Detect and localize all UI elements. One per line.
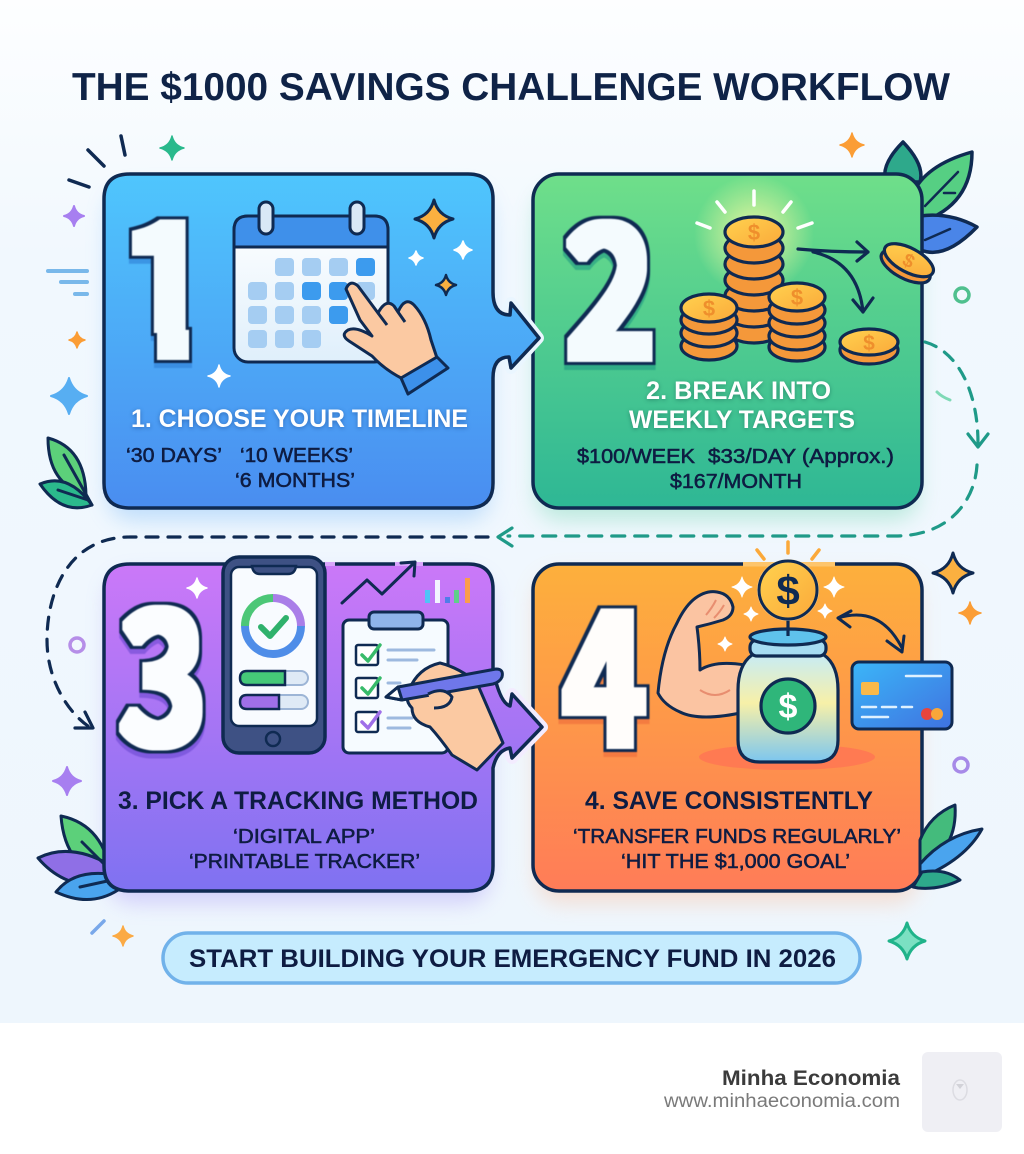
panel 2 details: $100/WEEK (577, 446, 696, 468)
icon: leaves behind panel 3 (38, 816, 118, 900)
decoration: blue dash (92, 921, 104, 933)
decoration: orange sparkle left (69, 332, 85, 348)
icon: pointing hand (344, 283, 448, 394)
pill shape (163, 933, 860, 983)
panel 3 big numeral: 3 (119, 531, 207, 797)
icon: coin stacks with arrows (681, 175, 938, 364)
icon: coin stacks with arrows: $ (791, 285, 803, 310)
footer logo placeholder (922, 1052, 1002, 1132)
icon: jar with dollar: $ (779, 688, 798, 726)
decoration: purple sparkle (64, 206, 84, 226)
icon: phone with progress app (223, 557, 325, 753)
icon: leaves left of panel 1 (40, 438, 92, 508)
panel 4: save consistently (533, 532, 982, 891)
decoration: purple sparkle bottom left (53, 767, 81, 795)
panel 4 heading: 4. SAVE CONSISTENTLY (585, 787, 873, 815)
icon: mini bar chart (425, 578, 470, 603)
decoration: small green dash (937, 392, 950, 400)
panel 3 top border gaps (325, 562, 423, 566)
icon: writing hand with pen (386, 663, 503, 770)
panel 4 top border gap (743, 562, 835, 566)
connector: teal dashed arrow (498, 342, 988, 546)
panel 4 details (573, 826, 901, 873)
panel 3: tracking method (104, 531, 542, 891)
panel 1: choose timeline (104, 143, 539, 508)
icon: coin stacks with arrows: $ (899, 250, 918, 274)
panel 3 heading: 3. PICK A TRACKING METHOD (118, 787, 478, 815)
panel 4 big numeral: 4 (562, 532, 646, 798)
icon: gold dollar coin with rays: $ (776, 567, 800, 614)
panel 2 heading: 2. BREAK INTO (646, 377, 831, 405)
icon: coin stacks with arrows: $ (863, 332, 875, 355)
panel 2 heading (629, 377, 855, 434)
decoration: orange sparkle bottom left (113, 926, 133, 946)
decoration: purple ring (70, 638, 84, 652)
panel 1 details (126, 445, 355, 492)
icon: two way arrow (838, 611, 904, 652)
connector: navy dashed arrow (47, 537, 488, 728)
icon: sparkles (208, 200, 472, 387)
panel 2 big numeral: 2 (564, 145, 656, 411)
icon: calendar (234, 202, 388, 362)
title: THE $1000 SAVINGS CHALLENGE WORKFLOW (72, 66, 950, 109)
panel 2 card (533, 174, 922, 508)
decoration: speed lines (48, 271, 87, 294)
panel soft shadows (108, 190, 918, 903)
panel 1 big numeral: 1 (118, 143, 214, 409)
panel 1 details: ‘6 MONTHS’ (235, 470, 355, 492)
panel 2 details (577, 446, 894, 493)
panel 3 details: ‘PRINTABLE TRACKER’ (189, 851, 420, 873)
footer band (0, 1023, 1024, 1154)
icon: coin stacks with arrows: $ (748, 220, 760, 245)
panel 1 arrow halo (505, 303, 538, 368)
panel 3 arrow halo (505, 694, 542, 758)
icon: gold dollar coin with rays (718, 542, 844, 651)
icon: coin stacks with arrows: $ (703, 296, 715, 321)
panel 3 details: ‘DIGITAL APP’ (233, 826, 375, 848)
footer url: www.minhaeconomia.com (663, 1091, 900, 1112)
panel 1 card with arrow (104, 174, 539, 508)
icon: credit card (852, 662, 952, 729)
pill text: START BUILDING YOUR EMERGENCY FUND IN 2026 (189, 945, 836, 973)
icon: leaves behind panel 2 (885, 142, 977, 252)
panel 3 details (189, 826, 420, 873)
panel 1 details: ‘30 DAYS’ (126, 445, 222, 467)
icon: clipboard checklist (343, 612, 448, 753)
decoration: orange sparkle right (959, 602, 981, 624)
footer brand name: Minha Economia (722, 1067, 900, 1090)
panel 4 details: ‘TRANSFER FUNDS REGULARLY’ (573, 826, 901, 848)
decoration: green ring (955, 288, 969, 302)
decoration: gold sparkle right (933, 553, 973, 593)
panel 2: weekly targets (533, 145, 938, 508)
decoration: teal sparkle (889, 923, 925, 959)
icon: jar with dollar (738, 615, 838, 762)
panel 1 heading: 1. CHOOSE YOUR TIMELINE (131, 405, 468, 433)
panel 1 details: ‘10 WEEKS’ (240, 445, 353, 467)
decoration: white sparkle (187, 578, 207, 598)
panel 2 details: $33/DAY (Approx.) (708, 446, 894, 468)
panel 2 details: $167/MONTH (670, 471, 802, 493)
panel 2 heading: WEEKLY TARGETS (629, 406, 855, 434)
panel 3 card with arrow (104, 564, 542, 891)
icon: leaves right of panel 4 (913, 805, 982, 888)
decoration: blue sparkle left (51, 378, 87, 414)
decoration: orange sparkle top right (840, 133, 864, 157)
decoration: purple ring right (954, 758, 968, 772)
decoration: burst lines top left (69, 136, 125, 187)
icon: jar shadow (699, 744, 875, 770)
icon: trend arrow (342, 562, 415, 603)
call to action pill (163, 933, 860, 983)
panel 4 card (533, 564, 922, 891)
icon: flexed arm (658, 592, 745, 717)
decoration: green sparkle (160, 136, 184, 160)
panel 4 details: ‘HIT THE $1,000 GOAL’ (621, 851, 850, 873)
